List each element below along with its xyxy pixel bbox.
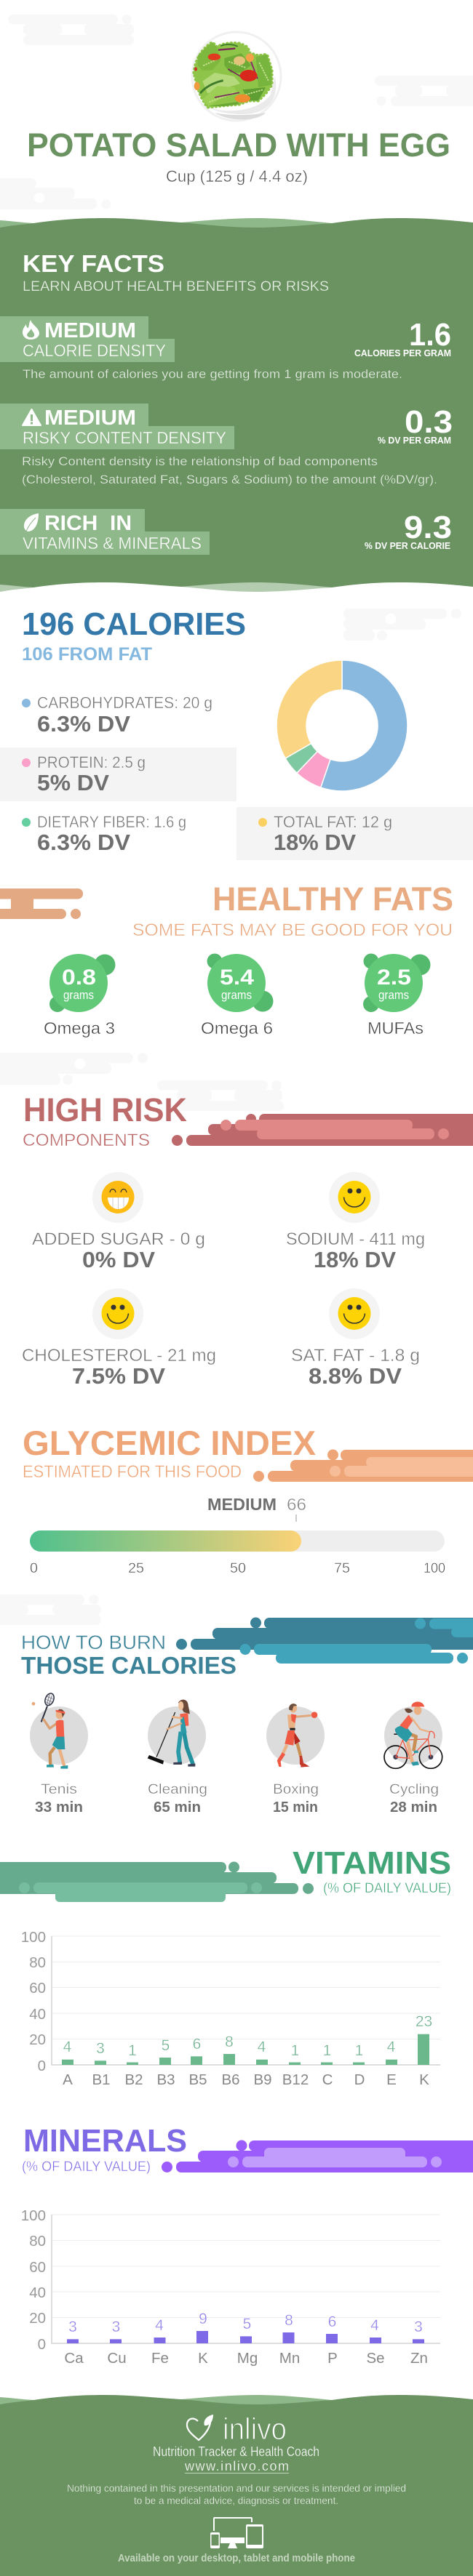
vitamins and minerals label [0,509,210,555]
risky content value: % DV PER GRAM [378,435,451,446]
gauge scale labels: 75 [334,1561,350,1576]
bar chart: vitamins: 4 [387,2039,396,2055]
gauge value: 66 [287,1495,306,1514]
footer background [0,2395,473,2576]
omega 6: Omega 6 [201,1019,273,1038]
icon: leaf [24,513,39,531]
bar chart: minerals: 5 [243,2316,251,2332]
gauge scale labels: 100 [424,1561,445,1576]
bar chart: minerals: K [198,2350,208,2367]
mufas: 2.5 [377,966,411,990]
bar chart: vitamins: 4 [63,2039,72,2055]
bar chart: vitamins: 23 [416,2013,432,2030]
risky content value [378,404,453,446]
item: sodium: SODIUM - 411 mg [286,1229,425,1249]
mufas: grams [378,989,409,1002]
bar chart: vitamins: 8 [225,2034,234,2050]
item: cholesterol: CHOLESTEROL - 21 mg [22,1346,216,1365]
legend: total fat: 18% DV [274,830,356,855]
band background [0,218,473,604]
icon: smiling face [338,1181,371,1213]
subheading: (% OF DAILY VALUE) [323,1880,451,1896]
heading: healthy fats: HEALTHY FATS [212,880,453,918]
legend: carbohydrates: CARBOHYDRATES: 20 g [37,694,212,712]
label: RISKY CONTENT DENSITY [23,428,226,447]
omega 3: Omega 3 [44,1019,115,1038]
bar chart: vitamins: 20 [29,2031,46,2048]
header panel [0,15,473,209]
calorie density value: CALORIES PER GRAM [354,348,451,358]
bar chart: vitamins: C [322,2071,333,2088]
bar chart: vitamins: 60 [29,1980,46,1997]
panel: vitamins [0,1845,451,2088]
panel: high risk components [0,1053,473,1389]
disclaimer: Nothing contained in this presentation and our services is intended or implied [67,2482,406,2494]
decorative clouds [0,1053,284,1111]
availability note: Available on your desktop, tablet and mobile phone [118,2553,355,2564]
decorative bars [176,1617,473,1664]
omega 3: 0.8 [62,966,96,990]
bar chart: minerals: 4 [370,2317,379,2334]
subheading: SOME FATS MAY BE GOOD FOR YOU [132,920,453,940]
legend: protein: 5% DV [37,770,109,795]
gauge scale labels [30,1561,445,1576]
bar chart: vitamins: 80 [29,1954,46,1971]
icon: grinning face [102,1181,134,1213]
legend: total fat: TOTAL FAT: 12 g [274,813,392,831]
omega 6: 5.4 [220,966,254,990]
legend: carbohydrates: 6.3% DV [37,711,130,737]
bar chart: minerals: 20 [29,2310,46,2327]
bar chart: vitamins: B3 [156,2071,175,2088]
decorative bars [162,2140,473,2172]
bar chart: vitamins: 1 [355,2042,363,2059]
gauge value [207,1495,306,1522]
calorie density label [0,316,175,362]
decorative bars [253,1450,473,1482]
panel: glycemic index [23,1424,473,1576]
mufas [363,954,431,1038]
icon: person sweeping [148,1700,195,1767]
decorative bars [0,888,83,919]
item: sodium: 18% DV [314,1247,396,1272]
activity: tennis: Tenis [41,1781,77,1797]
bar chart: minerals: 4 [155,2317,164,2334]
bar chart: minerals: 9 [199,2311,207,2327]
legend: total fat [236,807,473,860]
gauge scale labels: 0 [30,1561,38,1576]
panel: key facts [0,218,473,604]
bar chart: vitamins: A [63,2071,73,2088]
subheading: ESTIMATED FOR THIS FOOD [23,1462,242,1482]
bar chart: vitamins: 3 [96,2040,105,2057]
bar chart: vitamins: 100 [21,1929,46,1946]
bar chart: vitamins: K [419,2071,429,2088]
decorative bars [172,1114,473,1146]
rating: RICH IN [44,512,132,535]
legend: carbohydrates [22,694,212,737]
bar chart: minerals: 40 [29,2284,46,2301]
item: saturated fat: SAT. FAT - 1.8 g [291,1346,420,1365]
bar chart: minerals: 3 [68,2319,77,2335]
bar chart: vitamins: 1 [291,2042,299,2059]
bar chart: vitamins: 4 [258,2039,266,2055]
item: cholesterol: 7.5% DV [72,1363,165,1389]
bar chart: minerals: Cu [107,2350,127,2367]
legend: dietary fiber: DIETARY FIBER: 1.6 g [37,813,186,831]
bar chart: vitamins: 1 [128,2042,137,2059]
omega 6 [201,954,274,1038]
label: VITAMINS & MINERALS [23,534,202,553]
panel: how to burn calories [0,1594,473,1815]
activity: cleaning [148,1700,207,1815]
legend: dietary fiber [22,813,186,855]
subheading: LEARN ABOUT HEALTH BENEFITS OR RISKS [23,279,329,294]
omega 3: grams [63,989,94,1002]
activity: cleaning: 65 min [154,1799,201,1815]
legend: protein: PROTEIN: 2.5 g [37,753,146,771]
bar chart: vitamins: E [386,2071,397,2088]
bar chart: vitamins: 5 [162,2037,170,2054]
gauge scale labels: 50 [230,1561,246,1576]
activity: boxing: Boxing [273,1781,319,1797]
website link: www.inlivo.com [184,2459,289,2473]
heading: key facts: KEY FACTS [23,250,164,277]
item: saturated fat [291,1288,420,1389]
vitamins and minerals value: % DV PER CALORIE [365,540,450,551]
icon: tennis player [32,1692,68,1769]
risky content label [0,404,234,449]
calorie density value: 1.6 [409,317,451,353]
vitamins and minerals value: 9.3 [404,510,452,545]
legend: protein [0,747,236,801]
bar chart: minerals: 0 [38,2336,46,2353]
title: POTATO SALAD WITH EGG [27,127,450,164]
rating: MEDIUM [44,319,136,342]
item: saturated fat: 8.8% DV [309,1363,402,1389]
heading: those calories: THOSE CALORIES [21,1652,236,1679]
icon: salad bowl [192,32,281,121]
activity: cycling: Cycling [389,1781,439,1797]
icon: cyclist [384,1702,442,1768]
donut chart [277,660,408,791]
heading: vitamins: VITAMINS [293,1845,451,1881]
panel: healthy fats [0,880,453,1038]
bar chart: minerals: 6 [328,2314,336,2330]
icon: boxer [277,1704,317,1768]
heading: glycemic index: GLYCEMIC INDEX [23,1424,316,1462]
icon: smiling face [102,1297,134,1330]
risky content description [22,455,437,486]
omega 6: grams [221,989,252,1002]
bar chart: minerals: Ca [64,2350,84,2367]
bar chart: vitamins: 40 [29,2006,46,2023]
bar chart: vitamins [21,1929,440,2088]
icon: warning [23,409,41,425]
calorie density description: The amount of calories you are getting from 1 gram is moderate. [23,368,402,381]
heading: high risk: HIGH RISK [23,1091,187,1128]
activity: tennis: 33 min [35,1799,83,1815]
bar chart: minerals: Mn [279,2350,300,2367]
bar chart: vitamins: B12 [282,2071,309,2088]
serving size: Cup (125 g / 4.4 oz) [166,167,308,185]
activity: cycling [384,1702,442,1815]
bar chart: minerals: 8 [285,2312,293,2329]
bar chart: minerals: Mg [237,2350,258,2367]
item: sodium [286,1172,425,1272]
decorative cloud: upper right [375,76,473,106]
subheading: components: COMPONENTS [23,1131,150,1150]
icon: flame [23,320,39,340]
item: added sugar [32,1172,205,1272]
risky content value: 0.3 [405,404,453,440]
item: added sugar: ADDED SUGAR - 0 g [32,1229,205,1249]
activity: cleaning: Cleaning [148,1781,207,1797]
subheading: (% OF DAILY VALUE) [22,2159,151,2175]
icon: smiling face [338,1297,371,1330]
risky content description: (Cholesterol, Saturated Fat, Sugars & Sodium) to the amount (%DV/gr). [22,473,437,486]
bar chart: minerals: 60 [29,2259,46,2276]
item: added sugar: 0% DV [82,1247,155,1272]
icon: devices [210,2518,263,2548]
heading: how to burn: HOW TO BURN [21,1632,166,1653]
gauge bar [30,1530,445,1552]
panel: minerals [21,2123,473,2367]
bar chart: vitamins: B1 [92,2071,111,2088]
activity: boxing: 15 min [273,1799,318,1815]
decorative cloud [0,1594,101,1625]
decorative bars [0,1861,314,1902]
bar chart: vitamins: 6 [193,2036,201,2053]
gauge value: MEDIUM [207,1495,277,1514]
omega 3 [44,954,115,1038]
bar chart: minerals: P [327,2350,338,2367]
bar chart: minerals: Fe [151,2350,169,2367]
label: CALORIE DENSITY [23,341,166,360]
logo: inlivo: inlivo [223,2412,287,2446]
logo: inlivo [187,2412,287,2446]
decorative cloud [343,609,461,641]
calorie density value [354,317,451,358]
bar chart: minerals [21,2207,440,2367]
bar chart: vitamins: 0 [38,2058,46,2074]
gauge scale labels: 25 [128,1561,144,1576]
bar chart: minerals: Zn [410,2350,428,2367]
risky content description: Risky Content density is the relationship of bad components [22,455,378,468]
bar chart: minerals: 80 [29,2233,46,2250]
activity: tennis [30,1692,88,1815]
rating: MEDIUM [44,406,136,430]
panel: footer [0,2395,473,2576]
bar chart: vitamins: B2 [124,2071,143,2088]
bar chart: minerals: 100 [21,2207,46,2224]
mufas: MUFAs [367,1019,424,1038]
subheading: from fat: 106 FROM FAT [22,644,152,665]
item: cholesterol [22,1288,216,1389]
bar chart: vitamins: 1 [323,2042,331,2059]
bar chart: minerals: 3 [414,2319,423,2335]
decorative cloud: lower left [0,178,111,209]
bar chart: vitamins: D [354,2071,365,2088]
bar chart: minerals: Se [366,2350,385,2367]
tagline: Nutrition Tracker & Health Coach [153,2444,319,2459]
activity: boxing [266,1704,325,1815]
legend: dietary fiber: 6.3% DV [37,830,130,855]
activity: cycling: 28 min [390,1799,437,1815]
bar chart: vitamins: B9 [253,2071,272,2088]
disclaimer: to be a medical advice, diagnosis or treatment. [134,2495,338,2506]
bar chart: vitamins: B6 [221,2071,240,2088]
disclaimer [67,2482,406,2506]
heading: minerals: MINERALS [23,2123,187,2159]
decorative cloud: upper left [8,15,134,45]
heading: calories: 196 CALORIES [22,606,246,642]
bar chart: minerals: 3 [112,2319,120,2335]
vitamins and minerals value [365,510,452,551]
panel: calories [0,606,473,860]
bar chart: vitamins: B5 [188,2071,207,2088]
